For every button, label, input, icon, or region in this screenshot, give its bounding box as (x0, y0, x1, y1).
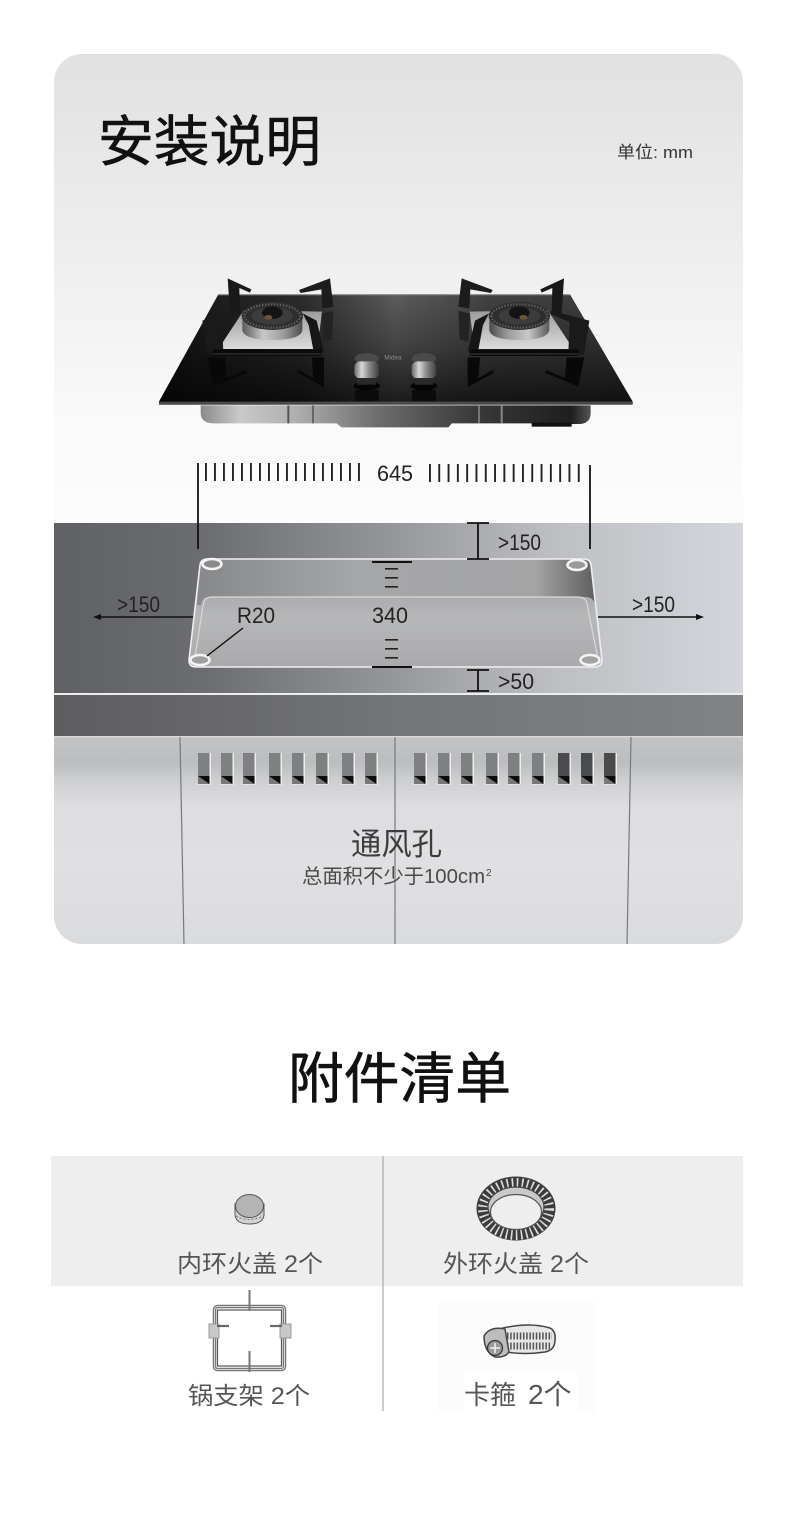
unit label: 单位: mm (617, 143, 693, 162)
dimension: depth 340: 340 (372, 603, 408, 628)
dimension: R20 corner radius: R20 (237, 603, 275, 628)
heading: accessories list: 附件清单 (288, 1048, 511, 1110)
dimension: right clearance >150 (598, 592, 704, 620)
knobs (353, 353, 437, 401)
dimension: rear clearance >150 (467, 523, 541, 559)
dimension: depth 340 (372, 561, 412, 668)
dimension: width 645: 645 (377, 461, 413, 486)
label: outer ring cap: 外环火盖 2个 (443, 1251, 589, 1278)
label: pan support: 锅支架 2个 (188, 1383, 310, 1410)
left burner and grate (202, 278, 333, 387)
countertop front edge (54, 693, 743, 736)
panel: accessories grid (51, 1156, 743, 1412)
ventilation slots (197, 753, 617, 785)
vent label (302, 827, 492, 888)
dimension: right clearance >150: >150 (632, 592, 675, 617)
stove tray (201, 405, 591, 427)
dimension: rear clearance >150: >150 (498, 530, 541, 555)
icon: hose clamp (484, 1325, 555, 1357)
countertop surface (54, 523, 743, 694)
dimension: front clearance >50: >50 (498, 669, 534, 694)
vent label: 2 (486, 868, 492, 879)
icon: inner burner cap (235, 1194, 264, 1224)
cabinet front (54, 736, 743, 944)
vent label: 总面积不少于100cm (302, 865, 485, 888)
title: installation instructions: 安装说明 (98, 111, 321, 173)
right burner and grate (458, 278, 589, 387)
panel: installation instructions (54, 54, 743, 944)
dimension: left clearance >150: >150 (117, 592, 160, 617)
icon: pan support (209, 1290, 291, 1372)
wall background (54, 54, 743, 384)
label: clamp: 卡箍 (464, 1380, 516, 1410)
label: inner ring cap: 内环火盖 2个 (177, 1251, 323, 1278)
dimension: left clearance >150 (93, 592, 193, 620)
label: clamp: 2个 (528, 1379, 572, 1410)
dimension: R20 corner radius (207, 603, 275, 656)
brand mark: Midea (384, 354, 402, 361)
icon: outer burner ring (476, 1176, 556, 1240)
vent label: 通风孔 (351, 827, 442, 862)
gas stove product image (159, 278, 633, 427)
dimension: front clearance >50 (467, 669, 534, 694)
glass top (159, 294, 633, 405)
cutout opening (189, 559, 602, 667)
